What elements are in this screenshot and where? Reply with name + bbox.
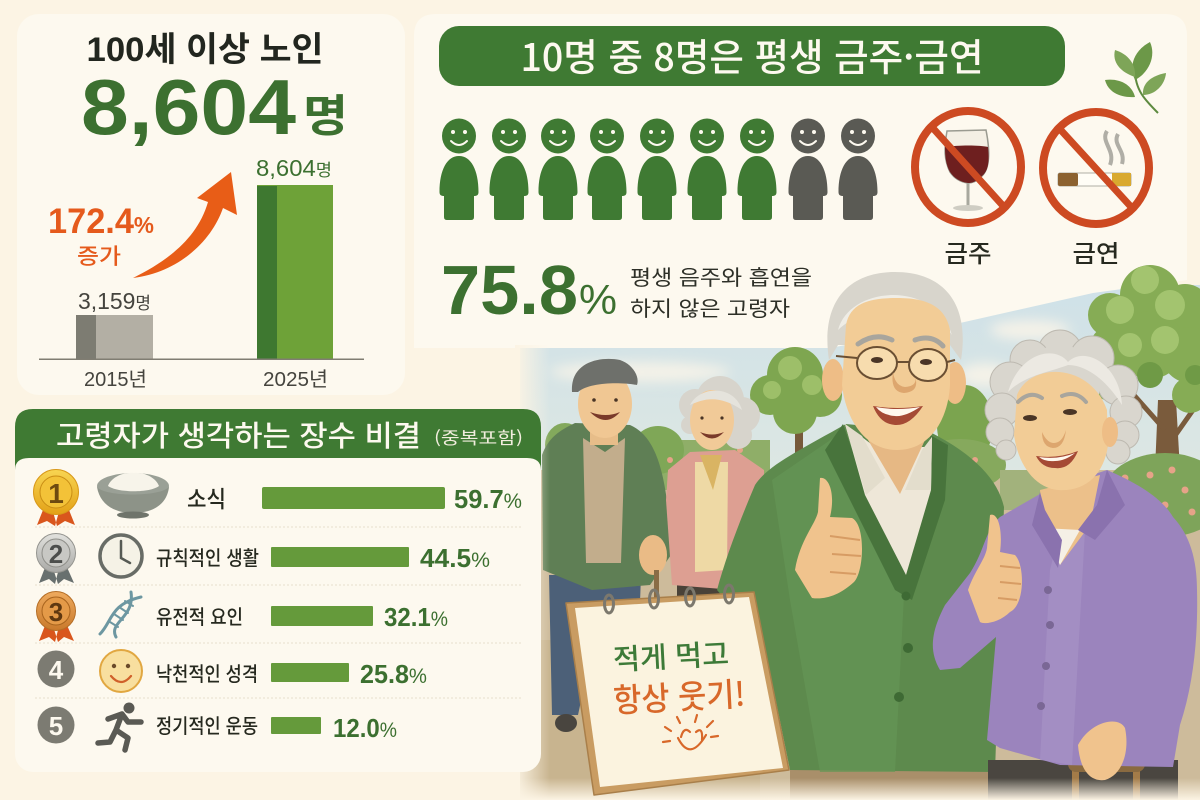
row 4: optimism xyxy=(38,650,427,692)
value 32.1: 32.1% xyxy=(384,602,448,632)
sign: eat little, always smile xyxy=(566,585,789,795)
far trees xyxy=(545,385,1060,510)
bar chart: 2015 vs 2025 xyxy=(39,155,364,391)
medal 2: 2 xyxy=(49,539,63,569)
skirt xyxy=(988,760,1178,800)
person gray 8 xyxy=(788,118,828,220)
hand on cane xyxy=(1078,722,1126,780)
icon: no alcohol xyxy=(915,111,1021,223)
person green 1 xyxy=(440,118,478,220)
bar 25.8 xyxy=(271,663,349,682)
value 2015: 3,159명 xyxy=(78,288,151,314)
icon: smile xyxy=(100,650,142,692)
row 2: regular life xyxy=(36,534,490,584)
rank 4 xyxy=(38,650,74,688)
year 2015: 2015년 xyxy=(84,368,147,391)
person gray 9 xyxy=(838,118,878,220)
row 1: eat little xyxy=(34,470,522,526)
scene backdrop: sky and ground xyxy=(520,285,1200,800)
panel heading: 고령자가 생각하는 장수 비결 xyxy=(56,413,421,455)
rank 4: 4 xyxy=(49,655,64,685)
growth percent: 172.4% xyxy=(48,202,154,241)
illustration: small woman in background xyxy=(654,376,764,610)
heading banner xyxy=(439,26,1065,86)
panel: longevity secrets ranking xyxy=(15,409,541,772)
flowering hedge xyxy=(667,447,1200,537)
arrow: growth xyxy=(133,172,237,278)
illustration: small man in background xyxy=(542,359,671,732)
sign smiley xyxy=(663,715,718,749)
person green 6 xyxy=(688,118,726,220)
rank 5 xyxy=(38,706,74,744)
thumbs up hand xyxy=(795,478,862,598)
sign line one: 적게 먹고 xyxy=(612,631,730,679)
description line one: 평생 음주와 흡연을 xyxy=(630,262,812,292)
medal 1: 1 xyxy=(48,478,64,509)
bar 2015 xyxy=(76,315,153,359)
label: optimism: 낙천적인 성격 xyxy=(156,658,258,687)
big number: 8,604 xyxy=(81,63,296,151)
value 25.8: 25.8% xyxy=(360,659,427,689)
cane xyxy=(1068,754,1145,800)
label: regular life: 규칙적인 생활 xyxy=(156,542,259,571)
woman's head xyxy=(985,330,1142,490)
label: no smoking: 금연 xyxy=(1072,234,1120,269)
statistic: 75.8 percent: 75.8 xyxy=(441,251,578,329)
icon: runner xyxy=(98,702,141,750)
bar 59.7 xyxy=(262,487,445,509)
panel: centenarian count xyxy=(17,14,405,395)
row 5: exercise xyxy=(38,702,397,750)
label: no alcohol: 금주 xyxy=(944,234,992,269)
axis baseline xyxy=(39,358,364,360)
medal 3: 3 xyxy=(49,597,63,627)
edge fades xyxy=(515,345,1200,800)
medal 1 xyxy=(34,470,78,526)
person green 2 xyxy=(490,118,528,220)
year 2025: 2025년 xyxy=(263,368,328,391)
big number unit: 명 xyxy=(303,80,348,144)
value 2025: 8,604명 xyxy=(256,155,332,181)
row 3: genetics xyxy=(36,592,448,642)
label: exercise: 정기적인 운동 xyxy=(156,710,258,739)
sign rings xyxy=(604,585,734,613)
person green 3 xyxy=(538,118,578,220)
icon: no smoking xyxy=(1043,112,1149,224)
person green 5 xyxy=(638,118,676,220)
bar 2025 xyxy=(257,185,333,359)
heading banner: 10명 중 8명은 평생 금주·금연 xyxy=(520,27,984,82)
big man's head xyxy=(822,272,966,450)
woman's thumbs up hand xyxy=(968,515,1022,623)
icon: rice bowl xyxy=(97,473,169,518)
illustration: big man with green cardigan xyxy=(717,272,1004,800)
rank 5: 5 xyxy=(49,711,63,741)
pictogram: nine people xyxy=(440,118,878,220)
medal 3 xyxy=(36,592,76,642)
person green 4 xyxy=(588,118,626,220)
panel: non-drinking and non-smoking xyxy=(414,14,1187,348)
description line two: 하지 않은 고령자 xyxy=(630,293,790,323)
panel heading note: (중복포함) xyxy=(434,424,523,449)
bar 32.1 xyxy=(271,606,373,626)
icon: clock xyxy=(100,535,142,577)
middle tree xyxy=(750,347,842,455)
person green 7 xyxy=(738,118,776,220)
value 44.5: 44.5% xyxy=(420,543,490,573)
icon: DNA xyxy=(100,592,141,637)
bar 12.0 xyxy=(271,717,321,734)
label: eat little: 소식 xyxy=(187,480,226,514)
label: genetics: 유전적 요인 xyxy=(156,601,243,630)
heading: 100 and over: 100세 이상 노인 xyxy=(86,31,324,69)
right large tree xyxy=(1088,265,1200,470)
illustration: big woman with purple cardigan xyxy=(933,330,1197,800)
medal 2 xyxy=(36,534,76,584)
growth label: 증가 xyxy=(77,239,121,271)
value 59.7: 59.7% xyxy=(454,484,522,514)
illustration: trees and hedges xyxy=(545,265,1200,537)
bar 44.5 xyxy=(271,547,409,567)
statistic percent sign: % xyxy=(579,276,617,323)
sign line two: 항상 웃기! xyxy=(612,668,746,722)
value 12.0: 12.0% xyxy=(333,713,397,743)
icon: leaf sprig xyxy=(1105,42,1166,113)
